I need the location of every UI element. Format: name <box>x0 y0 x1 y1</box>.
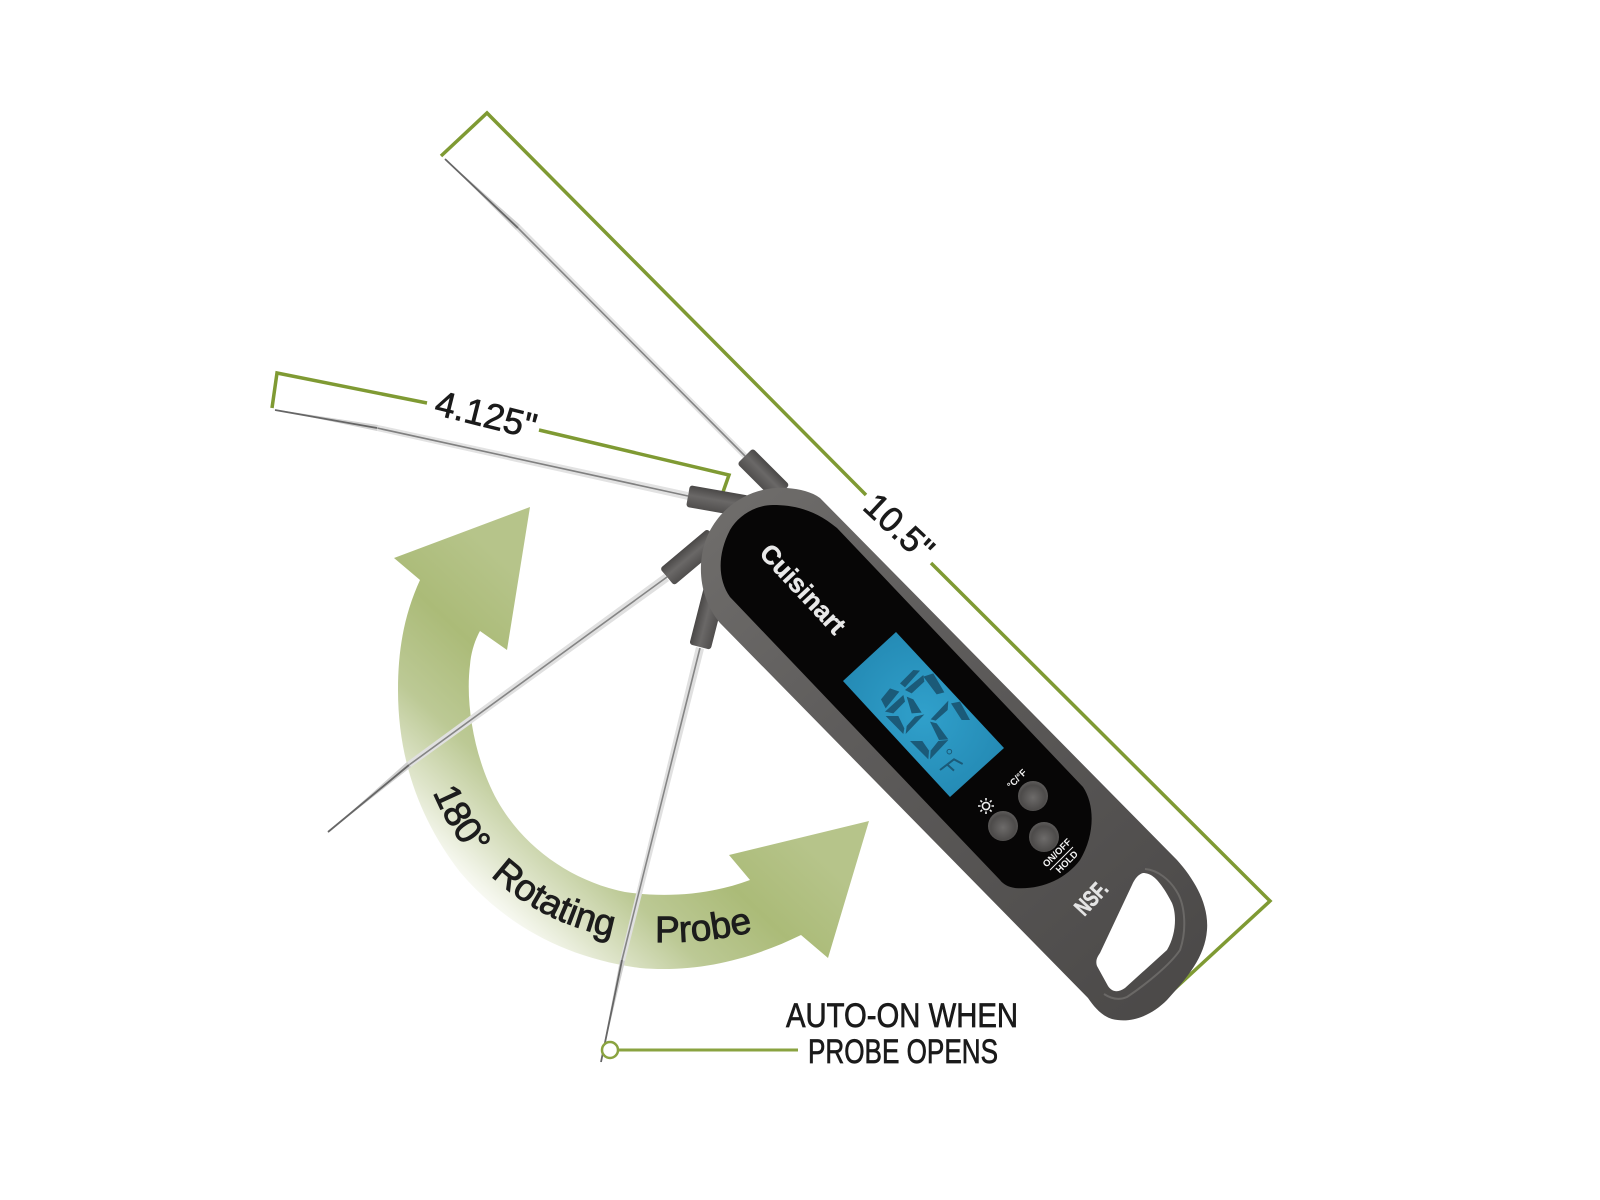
arrow label: 180 degree rotating probe: Rotating <box>492 858 615 943</box>
NSF mark: NSF. <box>1069 876 1113 920</box>
dimension bracket: 4.125 inch probe length <box>272 373 729 492</box>
dimension bracket: 10.5 inch overall length <box>441 113 1270 995</box>
probe position: diagonal needle and handle <box>326 529 722 834</box>
dimension label: 10.5 inch: 10.5" <box>856 486 941 569</box>
thermometer body <box>701 488 1207 1020</box>
probe position: upper needle and handle <box>443 157 790 501</box>
rotation arrow: curved gradient double-headed swoosh <box>394 507 869 969</box>
button label: power and hold: HOLD <box>1054 849 1081 876</box>
black front panel <box>721 505 1092 888</box>
callout: auto-on when probe opens <box>602 997 1018 1071</box>
LCD screen reading 165 F <box>843 632 1004 797</box>
brand logo: Cuisinart <box>754 538 852 640</box>
probe position: lower needle and handle <box>600 584 726 1065</box>
callout: auto-on when probe opens: PROBE OPENS <box>808 1033 998 1071</box>
arrow label: 180 degree rotating probe: 180° <box>433 786 490 844</box>
button label: unit switch: °C/°F <box>1005 767 1029 791</box>
callout: auto-on when probe opens: AUTO-ON WHEN <box>786 997 1018 1035</box>
icon: backlight sun <box>978 798 994 814</box>
buttons <box>988 781 1059 852</box>
bottle opener hole rim <box>1104 869 1184 999</box>
arrow label: 180 degree rotating probe <box>433 786 750 943</box>
probe position: horizontal needle and handle <box>272 409 749 517</box>
arrow label: 180 degree rotating probe: Probe <box>658 912 750 943</box>
button label: power and hold: ON/OFF <box>1041 837 1074 870</box>
dimension label: 4.125 inch: 4.125" <box>431 382 541 447</box>
